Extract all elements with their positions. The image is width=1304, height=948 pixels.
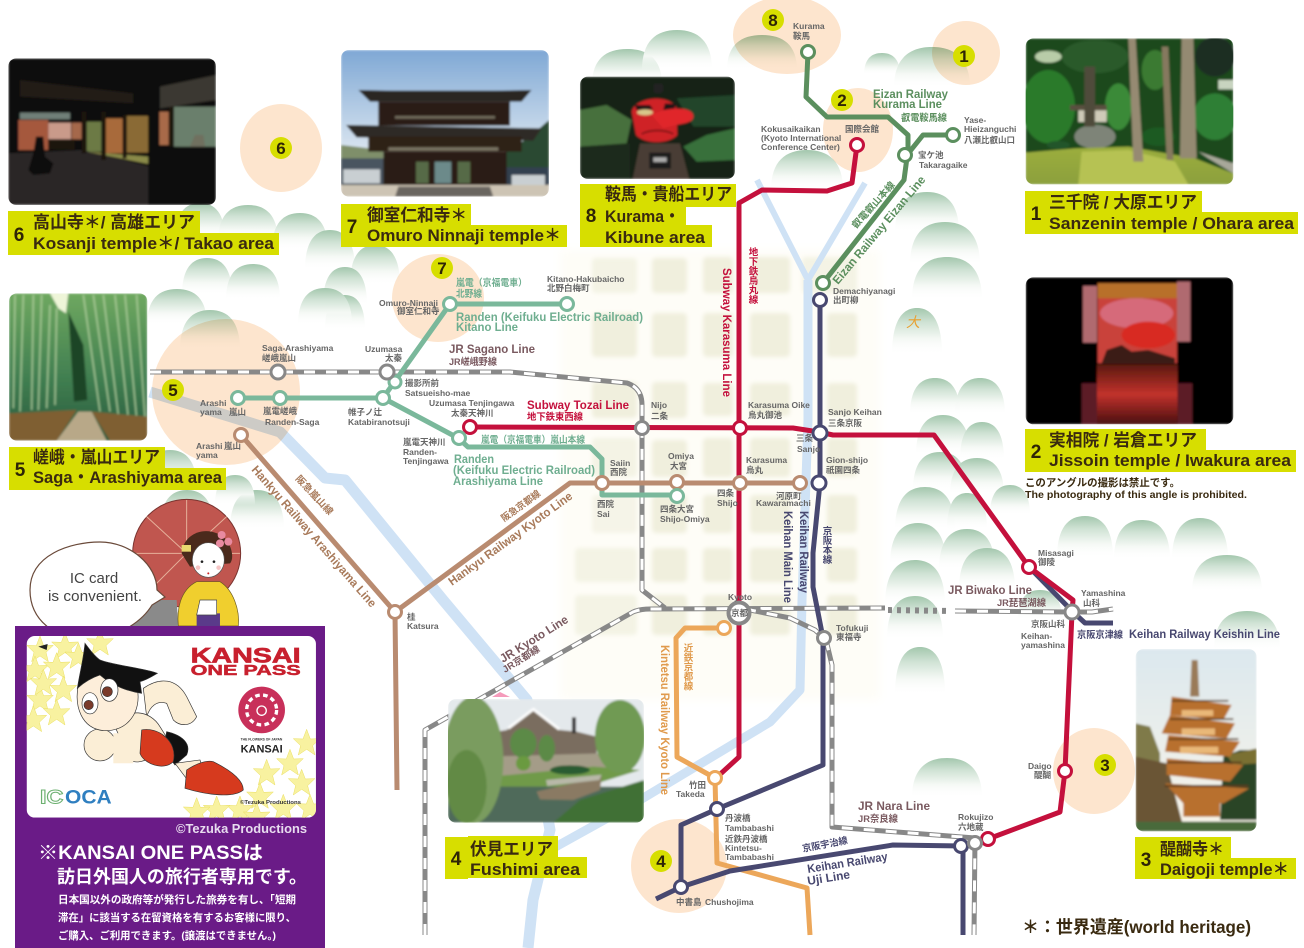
notice text: 日本国以外の政府等が発行した旅券を有し、「短期 <box>58 893 296 906</box>
Kintetsu line labels: Kintetsu Railway Kyoto Line <box>658 645 672 795</box>
label: Sanzenin: Sanzenin temple / Ohara area <box>1049 214 1295 233</box>
panel: area 3 Daigoji <box>1135 649 1296 879</box>
photography notice: The photography of this angle is prohibited. <box>1025 489 1247 501</box>
Eizan lines <box>806 52 953 283</box>
label: Sanzenin: 三千院 / 大原エリア <box>1049 193 1197 212</box>
station labels: Katabiranotsuji <box>348 417 410 427</box>
photo: bamboo grove <box>9 293 147 441</box>
panel: area 5 Saga Arashiyama <box>9 293 226 490</box>
notice text: ご購入、ご利用できます。(譲渡はできません。) <box>58 929 276 942</box>
label: Kurama Kibune: Kurama・ <box>605 207 680 226</box>
photo: Kosanji veranda <box>8 58 216 205</box>
station labels: Daigo <box>1028 761 1052 771</box>
speech bubble: IC card <box>70 570 118 587</box>
station labels: 六地蔵 <box>958 822 984 832</box>
station labels: 祇園四条 <box>826 465 861 475</box>
Hankyu line labels: 阪急嵐山線 <box>293 473 336 518</box>
Kintetsu line labels <box>658 642 693 795</box>
notice text <box>38 843 307 942</box>
label: Jissoin: 2 <box>1031 442 1041 463</box>
area circle 5: 5 <box>168 381 178 400</box>
station labels: Misasagi <box>1038 548 1074 558</box>
Hankyu line labels: Hankyu Railway Kyoto Line <box>446 489 575 588</box>
station labels: Yase- <box>964 115 986 125</box>
ICOCA logo <box>40 790 112 804</box>
label: Kurama Kibune: 8 <box>586 206 596 227</box>
station labels: 三条 <box>796 433 814 443</box>
hills <box>143 30 1280 798</box>
label: Daigoji: 醍醐寺＊ <box>1160 840 1224 859</box>
world heritage note: ＊：世界遺産(world heritage) <box>1022 917 1251 937</box>
Randen lines <box>238 304 677 495</box>
station labels: Shijo-Omiya <box>660 514 710 524</box>
ICOCA logo: OCA <box>65 787 112 808</box>
station labels: Satsueisho-mae <box>405 388 470 398</box>
stations <box>232 46 1079 894</box>
station labels: 嵐電嵯峨 <box>263 406 298 416</box>
photo: Daigoji pagoda <box>1136 649 1257 831</box>
illustration: maiko with umbrella <box>130 499 241 626</box>
label: Kosanji: 6 <box>14 225 24 246</box>
Subway line labels: 地下鉄烏丸線 <box>746 246 758 305</box>
ICOCA logo: IC <box>40 787 63 808</box>
station labels: 西院 <box>610 467 628 477</box>
panel: area 1 Sanzenin <box>1022 37 1298 234</box>
station labels: Kintetsu- <box>725 843 762 853</box>
station labels: Conference Center) <box>761 142 840 152</box>
Randen line labels: Kitano Line <box>456 320 518 334</box>
photo: Jissoin floor reflection <box>1026 277 1233 424</box>
label: Omuro Ninnaji: 7 <box>347 217 357 238</box>
Subway lines <box>470 145 1073 839</box>
station labels: 近鉄丹波橋 <box>725 834 768 844</box>
JR line labels: JR Kyoto Line <box>497 612 571 666</box>
station labels: 鞍馬 <box>793 31 811 41</box>
station labels: 大 <box>906 314 922 330</box>
notice text: ※KANSAI ONE PASSは <box>38 843 263 864</box>
Eizan line labels: Eizan Railway Eizan Line <box>830 173 929 287</box>
area circle 1 <box>932 21 1000 85</box>
area circle 6 <box>240 104 322 192</box>
icon: maiko figure <box>130 531 239 626</box>
station labels: 八瀬比叡山口 <box>964 135 1015 145</box>
Kansai One Pass logo: ONE PASS <box>191 663 301 679</box>
station labels: 北野白梅町 <box>547 283 590 293</box>
ICOCA card <box>26 636 316 818</box>
station labels: Tenjingawa <box>403 456 449 466</box>
area circle 5 <box>152 319 300 465</box>
station labels: 御陵 <box>1038 557 1056 567</box>
panel: area 4 Fushimi <box>443 697 645 879</box>
Hankyu line labels: Hankyu Railway Arashiyama Line <box>249 463 380 610</box>
station labels: Uzumasa <box>365 344 403 354</box>
station labels: Gion-shijo <box>826 455 868 465</box>
JR line labels: JR琵琶湖線 <box>997 597 1046 609</box>
station labels: Randen- <box>403 447 437 457</box>
JR line labels: JR Biwako Line <box>948 583 1032 597</box>
Eizan line labels: Eizan Railway <box>873 87 948 101</box>
station labels: 竹田 <box>689 780 706 790</box>
label: Omuro Ninnaji: 御室仁和寺＊ <box>367 206 467 225</box>
Randen line labels: (Keifuku Electric Railroad) <box>453 463 595 477</box>
station labels: 宝ケ池 <box>918 150 944 160</box>
station labels: 醍醐 <box>1034 770 1052 780</box>
station labels: 烏丸 <box>746 465 764 475</box>
station labels: yama <box>196 450 218 460</box>
station labels: 中書島 <box>676 897 702 907</box>
Randen line labels: Randen <box>454 452 494 466</box>
JR line labels: JR嵯峨野線 <box>449 356 497 368</box>
Eizan line labels <box>830 87 948 287</box>
station labels: Sanjo Keihan <box>828 407 882 417</box>
station labels: 河原町 <box>776 491 802 501</box>
label: Daigoji: Daigoji temple＊ <box>1160 860 1289 879</box>
ICOCA card: ©Tezuka Productions <box>240 799 301 806</box>
label: Daigoji: 3 <box>1141 850 1151 871</box>
label: Daigoji <box>1135 837 1296 879</box>
Eizan line labels: 叡電叡山本線 <box>849 179 898 231</box>
station labels: Hieizanguchi <box>964 124 1016 134</box>
Keihan line labels: Keihan Railway <box>797 511 811 593</box>
photo: Fushimi canal boat <box>443 697 645 823</box>
station labels: Karasuma <box>746 455 787 465</box>
station labels: Demachiyanagi <box>833 286 895 296</box>
Randen line labels: 北野線 <box>456 288 482 300</box>
station labels: 京都 <box>731 608 749 618</box>
station labels: Rokujizo <box>958 812 993 822</box>
Kintetsu line <box>676 628 810 935</box>
label: Fushimi: 伏見エリア <box>470 839 553 859</box>
station labels: 国際会館 <box>845 124 880 134</box>
Randen line labels: Arashiyama Line <box>453 474 543 488</box>
station labels: Kitano-Hakubaicho <box>547 274 624 284</box>
label: Saga Arashiyama <box>9 447 226 490</box>
Flowers of Japan Kansai logo: KANSAI <box>241 743 283 755</box>
Keihan line labels: Uji Line <box>806 867 851 888</box>
station labels: Nijo <box>651 400 667 410</box>
station labels: 嵐山 <box>229 407 246 417</box>
station labels: 東福寺 <box>836 632 862 642</box>
Hankyu line labels: 阪急京都線 <box>499 487 543 524</box>
Subway line labels: Subway Tozai Line <box>527 398 629 412</box>
panel: area 7 Omuro Ninnaji <box>341 50 567 247</box>
notice text: 訪日外国人の旅行者専用です。 <box>57 867 307 887</box>
area circle 2 <box>823 88 893 172</box>
label: Fushimi <box>445 836 587 879</box>
label: Omuro Ninnaji <box>341 204 567 247</box>
station labels: Kawaramachi <box>756 498 811 508</box>
station labels: Randen-Saga <box>265 417 320 427</box>
Eizan line labels: Kurama Line <box>873 97 942 111</box>
station labels: 山科 <box>1083 598 1101 608</box>
station labels: 西院 <box>597 499 615 509</box>
station labels: Yamashina <box>1081 588 1126 598</box>
station labels: Saiin <box>610 458 630 468</box>
station labels: 撮影所前 <box>405 378 440 388</box>
Keihan line labels: 京阪京津線 <box>1077 629 1123 641</box>
photo: tengu statue <box>580 77 735 179</box>
label: Fushimi: Fushimi area <box>470 860 581 879</box>
JR line labels: JR京都線 <box>500 643 543 676</box>
station labels: Sai <box>597 509 610 519</box>
station labels: 御室仁和寺 <box>397 306 440 316</box>
station labels: 丹波橋 <box>725 813 751 823</box>
area circle 7 <box>392 254 484 342</box>
photography notice <box>1025 476 1247 501</box>
area circle 3 <box>1053 728 1135 814</box>
city street grid <box>560 250 880 700</box>
panel: area 2 Jissoin <box>1025 277 1296 501</box>
Keihan lines <box>656 300 1113 935</box>
photo: Sanzenin moss garden <box>1022 37 1237 184</box>
photo: Ninnaji gate <box>341 50 549 197</box>
Eizan line labels: 叡電鞍馬線 <box>901 112 947 124</box>
station labels: Kokusaikaikan <box>761 124 821 134</box>
label: Kosanji: Kosanji temple＊/ Takao area <box>33 234 275 253</box>
panel: Kansai One Pass <box>15 626 325 948</box>
Subway line labels: 地下鉄東西線 <box>527 411 583 423</box>
Hankyu lines <box>241 435 800 790</box>
JR line labels: JR奈良線 <box>858 813 898 825</box>
station labels: 帷子ノ辻 <box>348 407 383 417</box>
pink marker <box>492 692 510 697</box>
Keihan line labels: 京阪宇治線 <box>801 834 849 855</box>
panel: area 6 Kosanji <box>8 58 279 255</box>
label: Fushimi: 4 <box>451 849 462 870</box>
station labels: 烏丸御池 <box>748 410 783 420</box>
Randen line labels: 嵐電（京福電車） <box>456 277 527 289</box>
station labels: Uzumasa Tenjingawa <box>429 398 515 408</box>
area circle 8: 8 <box>768 11 778 30</box>
station labels: 二条 <box>651 411 669 421</box>
photography notice: このアングルの撮影は禁止です。 <box>1025 476 1180 489</box>
label: Saga Arashiyama: 嵯峨・嵐山エリア <box>33 448 160 467</box>
area circle 2: 2 <box>837 91 847 110</box>
station labels: Tofukuji <box>836 623 868 633</box>
station labels: 大宮 <box>670 461 687 471</box>
station labels: Omuro-Ninnaji <box>379 298 438 308</box>
station labels: 嵐山 <box>224 441 241 451</box>
station labels: 三条京阪 <box>828 418 863 428</box>
station labels: Karasuma Oike <box>748 400 810 410</box>
label: Jissoin: Jissoin temple / Iwakura area <box>1049 451 1292 470</box>
station labels: 京阪山科 <box>1031 619 1066 629</box>
area circle 8 <box>733 0 841 74</box>
station labels: 嵐電天神川 <box>403 437 446 447</box>
station labels: Takeda <box>676 789 705 799</box>
station labels: Kyoto <box>728 592 752 602</box>
label: Kosanji <box>8 211 279 255</box>
station labels: 出町柳 <box>833 295 859 305</box>
Hankyu line labels <box>249 463 575 610</box>
label: Sanzenin <box>1025 191 1298 234</box>
area circle 3: 3 <box>1100 756 1110 775</box>
label: Omuro Ninnaji: Omuro Ninnaji temple＊ <box>367 226 561 245</box>
label: Saga Arashiyama: 5 <box>15 460 26 481</box>
Flowers of Japan Kansai logo: THE FLOWERS OF JAPAN <box>241 737 282 742</box>
station labels: Sanjo <box>797 444 820 454</box>
station labels: 太秦天神川 <box>451 408 494 418</box>
JR lines <box>150 372 1113 935</box>
Keihan line labels: Keihan Main Line <box>781 511 795 603</box>
Subway line labels <box>527 246 758 423</box>
station labels: Omiya <box>668 451 694 461</box>
station labels: 嵯峨嵐山 <box>262 353 296 363</box>
panel: area 8 Kurama Kibune <box>580 77 736 247</box>
area circle 1: 1 <box>959 47 969 66</box>
icon: red umbrella <box>133 499 241 607</box>
station labels: Kurama <box>793 21 825 31</box>
station labels <box>196 21 1126 907</box>
area circle 6: 6 <box>276 139 286 158</box>
station labels: Saga-Arashiyama <box>262 343 334 353</box>
label: Jissoin <box>1025 429 1296 472</box>
station labels: (Kyoto International <box>761 133 841 143</box>
Keihan line labels: Keihan Railway Keishin Line <box>1129 627 1280 641</box>
label: Kurama Kibune: 鞍馬・貴船エリア <box>605 185 732 204</box>
copyright: ©Tezuka Productions <box>176 821 307 836</box>
notice text: 滞在」に該当する在留資格を有するお客様に限り、 <box>58 911 296 924</box>
Astro Boy <box>77 643 243 795</box>
JR line labels <box>449 342 1046 825</box>
station labels: Arashi <box>200 398 226 408</box>
station labels: yamashina <box>1021 640 1065 650</box>
speech bubble: is convenient. <box>48 588 142 605</box>
label: Kurama Kibune: Kibune area <box>605 228 706 247</box>
station labels: 四条大宮 <box>660 504 694 514</box>
station labels: Takaragaike <box>919 160 968 170</box>
rivers <box>150 180 865 948</box>
station labels: Tambabashi <box>725 823 774 833</box>
Randen line labels: Randen (Keifuku Electric Railroad) <box>456 310 643 324</box>
Kintetsu line labels: 近鉄京都線 <box>682 642 693 691</box>
Subway line labels: Subway Karasuma Line <box>720 268 734 397</box>
label: Kosanji: 高山寺＊/ 高雄エリア <box>33 212 195 232</box>
area circle 4 <box>631 819 727 913</box>
station labels: Arashi <box>196 441 222 451</box>
Randen line labels <box>453 277 643 488</box>
station labels: Shijo <box>717 498 738 508</box>
label: Saga Arashiyama: Saga・Arashiyama area <box>33 468 223 487</box>
station labels: 四条 <box>717 488 735 498</box>
Flowers of Japan Kansai logo <box>238 687 285 755</box>
station labels: 桂 <box>407 612 416 622</box>
station labels: 太秦 <box>385 353 403 363</box>
station labels: Keihan- <box>1021 631 1052 641</box>
Keihan line labels: 京阪本線 <box>820 525 832 565</box>
area circle 7: 7 <box>437 259 447 278</box>
label: Jissoin: 実相院 / 岩倉エリア <box>1049 430 1197 450</box>
station labels: yama <box>200 407 222 417</box>
Kansai One Pass logo <box>191 648 300 676</box>
Keihan line labels: Keihan Railway <box>806 849 889 876</box>
JR line labels: JR Sagano Line <box>449 342 535 356</box>
label: Sanzenin: 1 <box>1031 204 1042 225</box>
label: Kurama Kibune <box>580 184 736 247</box>
Randen line labels: 嵐電（京福電車）嵐山本線 <box>481 434 585 446</box>
station labels: Katsura <box>407 621 439 631</box>
Keihan line labels <box>781 511 1280 888</box>
JR line labels: JR Nara Line <box>858 799 930 813</box>
station labels: Chushojima <box>705 897 754 907</box>
speech bubble <box>29 541 166 626</box>
Kansai One Pass logo: KANSAI <box>191 644 301 668</box>
station labels: Tambabashi <box>725 852 774 862</box>
area circle 4: 4 <box>656 852 666 871</box>
flower pattern <box>26 636 316 818</box>
